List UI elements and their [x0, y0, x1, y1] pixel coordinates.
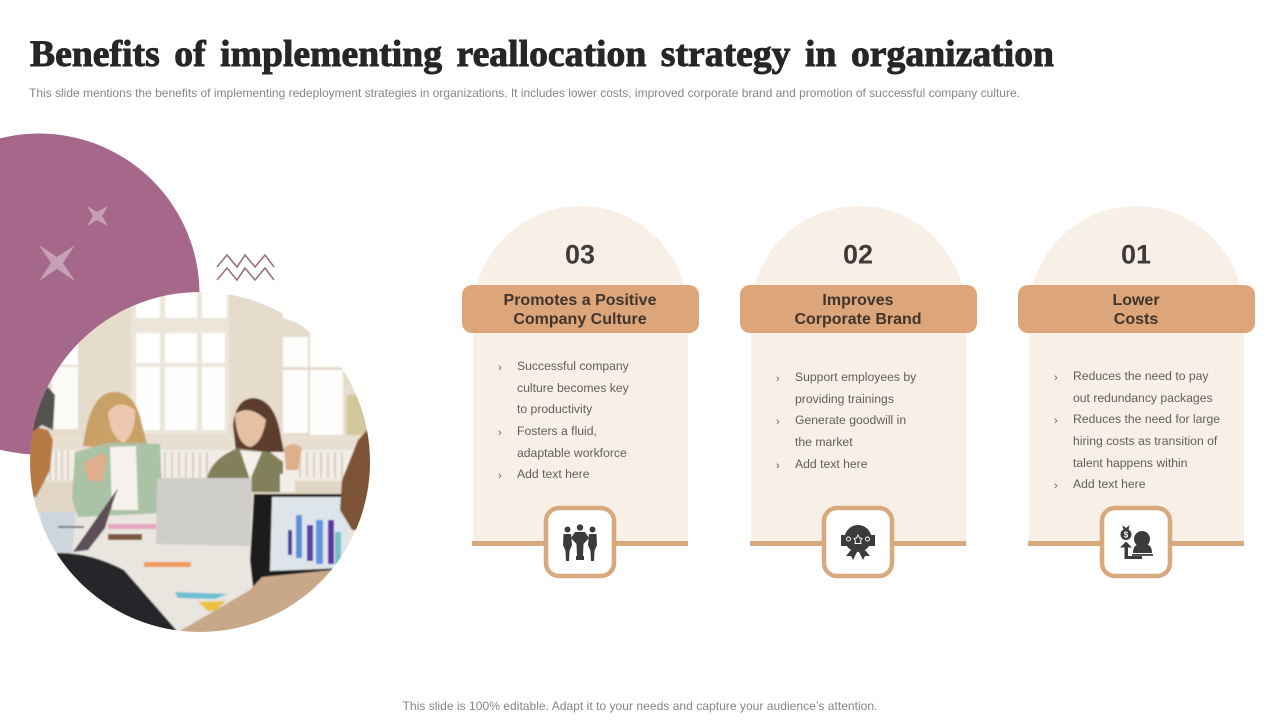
icon: team of people: [563, 524, 597, 561]
zigzag decoration: [217, 255, 274, 280]
title: Benefits of implementing reallocation strategy in organization: [30, 34, 1054, 75]
icon: money bag and person: $: [1124, 530, 1129, 540]
card 02 icon box: [824, 508, 892, 576]
photo right window: [282, 314, 367, 436]
card 02 bullet list: providing trainings: [795, 392, 894, 406]
card 02 bullet list: ›: [776, 373, 780, 385]
card 03 bullet list: Add text here: [517, 467, 590, 481]
card 01 number: 01: [1121, 240, 1151, 270]
card 03 bullet list: to productivity: [517, 402, 593, 416]
photo woman in olive blazer: [207, 398, 302, 492]
card 02 bullet list: Support employees by: [795, 370, 917, 384]
card 02 bullet list: [776, 370, 917, 472]
card 01 bullet list: hiring costs as transition of: [1073, 434, 1218, 448]
card 02 arch body: [751, 206, 966, 541]
card 02 number: 02: [843, 240, 873, 270]
photo radiators: [44, 449, 354, 482]
card 01 heading band: Lower: [1112, 292, 1160, 309]
photo left window: [51, 344, 79, 430]
card 02 heading band: [740, 285, 977, 333]
photo woman in green blazer: [72, 392, 163, 517]
subtitle: This slide mentions the benefits of implementing redeployment strategies in organizations. It includes lower costs, improved corporate brand and promotion of successful company culture.: [29, 86, 1020, 100]
card 01 bullet list: ›: [1054, 415, 1058, 427]
card 03 bullet list: Fosters a fluid,: [517, 424, 597, 438]
icon: money bag and person: [1120, 525, 1153, 559]
photo wall: [38, 292, 362, 438]
card 01 bullet list: ›: [1054, 480, 1058, 492]
photo centre window: [131, 292, 229, 434]
card 03 bullet list: Successful company: [517, 359, 630, 373]
card 01 arch body: [1029, 206, 1244, 541]
card 03 heading band: [462, 285, 699, 333]
card 02 base line: [750, 541, 966, 546]
card 02 bullet list: ›: [776, 460, 780, 472]
icon: large star: [39, 245, 75, 281]
photo bottom right shoulder: [179, 569, 332, 632]
photo right monitor with chart: [250, 494, 347, 596]
card 03 heading band: Promotes a Positive: [504, 292, 657, 309]
card 01 bullet list: Add text here: [1073, 477, 1146, 491]
photo left laptop: [73, 488, 118, 552]
card 02 bullet list: Add text here: [795, 457, 868, 471]
card 03 arch body: [473, 206, 688, 541]
card 03 bullet list: ›: [498, 362, 502, 374]
footer note: This slide is 100% editable. Adapt it to your needs and capture your audience’s attention.: [402, 699, 878, 713]
card 01 base line: [1028, 541, 1244, 546]
card 01 bullet list: Reduces the need for large: [1073, 412, 1220, 426]
photo left foreground head: [30, 426, 54, 498]
card 03 bullet list: [498, 359, 630, 482]
card 03 bullet list: culture becomes key: [517, 381, 630, 395]
card 02 heading band: Corporate Brand: [794, 311, 922, 328]
photo right foreground head: [339, 430, 370, 531]
card 01 heading band: Costs: [1114, 311, 1158, 328]
panel: card 03 promotes a positive company culture: [462, 206, 699, 576]
photo centre laptop: [156, 478, 252, 546]
photo: team meeting in circle: [20, 285, 380, 640]
photo floor and table: [34, 482, 356, 630]
decorative purple circle with stars: [0, 134, 200, 454]
panel: card 01 lower costs: [1018, 206, 1255, 576]
card 01 bullet list: Reduces the need to pay: [1073, 369, 1209, 383]
photo bottom left shoulder: [56, 552, 178, 630]
card 03 number: 03: [565, 240, 595, 270]
card 03 bullet list: ›: [498, 427, 502, 439]
card 03 bullet list: adaptable workforce: [517, 446, 627, 460]
card 02 bullet list: Generate goodwill in: [795, 413, 906, 427]
card 03 bullet list: ›: [498, 470, 502, 482]
card 03 heading band: Company Culture: [513, 311, 647, 328]
card 01 icon box: [1102, 508, 1170, 576]
card 03 icon box: [546, 508, 614, 576]
card 03 base line: [472, 541, 688, 546]
card 01 heading band: [1018, 285, 1255, 333]
icon: small star: [87, 206, 108, 226]
card 01 bullet list: [1054, 369, 1220, 492]
card 01 bullet list: ›: [1054, 372, 1058, 384]
card 02 bullet list: the market: [795, 435, 853, 449]
card 01 bullet list: talent happens within: [1073, 456, 1188, 470]
panel: card 02 improves corporate brand: [740, 206, 977, 576]
card 02 bullet list: ›: [776, 416, 780, 428]
photo table items: [58, 524, 228, 611]
card 02 heading band: Improves: [822, 292, 894, 309]
card 01 bullet list: out redundancy packages: [1073, 391, 1213, 405]
icon: award badge: [841, 525, 875, 560]
